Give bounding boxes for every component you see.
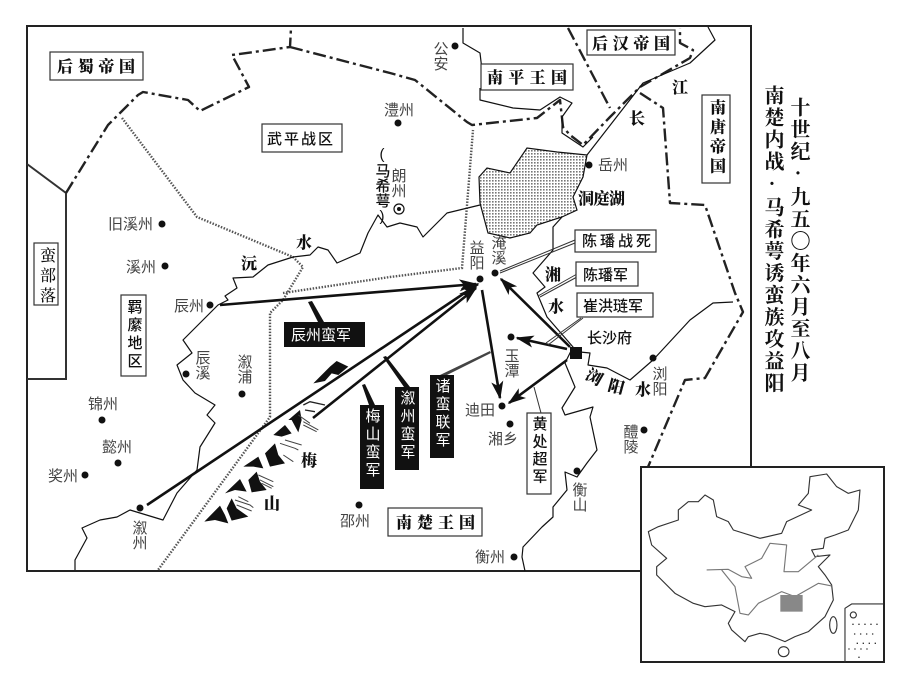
water and terrain names: 湘 [545,265,561,284]
label: Southern Chu kingdom [388,508,482,536]
place names: 奖州 [48,468,78,485]
place names: 醴陵 [622,424,638,454]
place names: 淹溪 [490,235,506,265]
label: Later Han empire [587,30,675,55]
empire and kingdom boundaries [66,28,743,467]
barbarian territory solid border [27,164,66,379]
place names: 邵州 [340,513,370,530]
place names: 锦州 [88,396,118,413]
black label: Xuzhou barbarian army [395,387,419,470]
place names: 懿州 [102,439,132,456]
water and terrain names: 水 [296,233,312,252]
water and terrain names: 水 [548,297,564,316]
label: Jimi area: 羁縻地区 [126,299,142,371]
water and terrain names: 江 [672,79,688,97]
rivers [75,27,733,571]
place names: 长沙府 [587,329,632,347]
black label: Meishan barbarian army: 梅山蛮军 [364,408,380,480]
label: Nanping kingdom [481,64,573,90]
label: Nanping kingdom: 南平王国 [487,68,567,87]
water and terrain names: 长 [629,109,645,128]
place names: 益阳 [468,240,484,270]
black label: allied barbarian armies: 诸蛮联军 [434,378,450,450]
label: Later Shu empire: 后蜀帝国 [57,57,135,76]
label: barbarian tribes [34,243,58,307]
place markers [82,42,656,560]
place names: 玉潭 [502,348,520,378]
place names [48,41,668,566]
black label: allied barbarian armies [430,375,454,458]
place names: 浏阳 [650,366,668,396]
label: Chen Fan army [576,262,638,286]
label: Southern Chu kingdom: 南楚王国 [396,513,475,532]
mountains: Meishan range [204,361,348,523]
label: Later Shu empire [50,52,143,80]
label: Cui Hongjian army: 崔洪琏军 [583,298,643,315]
place names: 迪田 [465,402,495,419]
label: Wuping district: 武平战区 [267,131,335,148]
place names: 辰溪 [194,350,210,380]
label: Cui Hongjian army [577,293,653,317]
place names: 溪州 [126,259,156,276]
black label: Meishan barbarian army [360,405,384,489]
water and terrain names: 浏 [582,365,606,389]
label: Huang Chuchao army [527,413,551,494]
water and terrain names: 山 [264,495,280,513]
water and terrain names: 水 [635,380,651,399]
place names: 岳州 [598,157,628,174]
label: Southern Tang empire [702,95,730,183]
water and terrain names: 沅 [241,254,257,273]
label: Chen Fan killed [575,230,656,252]
water and terrain names [241,79,688,513]
place names: 辰州 [174,298,204,315]
dotted boundaries of Wuping district [122,118,473,570]
army arrows [147,279,570,505]
title [761,85,810,394]
place names: 朗州 [390,168,406,198]
black label: Xuzhou barbarian army: 溆州蛮军 [398,389,416,462]
label: Huang Chuchao army: 黄处超军 [530,416,548,486]
place names: 旧溪州 [108,216,153,233]
label: Southern Tang empire: 南唐帝国 [708,98,726,177]
place names: 衡山 [570,482,588,512]
leader lines [308,240,583,413]
label: Chen Fan killed: 陈璠战死 [582,232,654,250]
label: Chen Fan army: 陈璠军 [583,266,628,284]
black label: Chenzhou barbarian army [284,322,365,347]
label: barbarian tribes: 蛮部落 [38,247,56,307]
label: Jimi area [121,295,146,376]
place names: 溆州 [130,519,148,550]
place names: 公安 [432,41,448,71]
place names: 溆浦 [236,353,252,385]
place names: 湘乡 [488,431,518,448]
water and terrain names: 阳 [606,376,626,398]
inset locator map of China [641,467,884,662]
water and terrain names: 梅 [301,451,317,470]
place names: (马希萼) [374,146,390,225]
black label: Chenzhou barbarian army: 辰州蛮军 [291,326,351,344]
place names: 衡州 [475,549,505,566]
Dongting lake [479,148,587,238]
main map frame [27,26,751,571]
water and terrain names: 洞庭湖 [578,189,625,208]
place names: 澧州 [384,102,414,119]
label: Later Han empire: 后汉帝国 [592,34,670,53]
label: Wuping district [262,124,342,152]
title: 十世纪·九五〇年六月至八月 [787,97,810,384]
title: 南楚内战·马希萼诱蛮族攻益阳 [761,85,784,394]
